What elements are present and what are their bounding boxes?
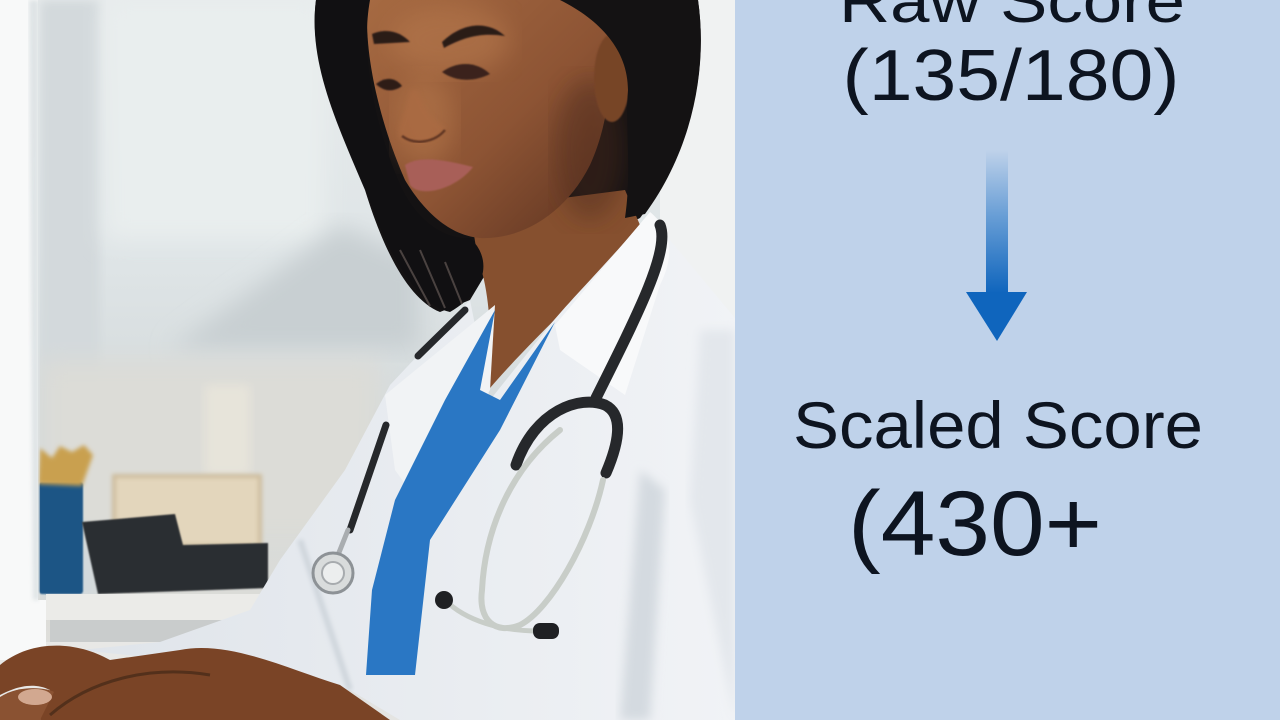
- hair back: [315, 0, 701, 312]
- coat folds: [620, 470, 665, 720]
- stethoscope chest piece: [313, 553, 353, 593]
- picture frame: [114, 476, 260, 546]
- nose: [399, 90, 445, 143]
- ear: [594, 34, 630, 122]
- pencil cup: [39, 482, 83, 594]
- lips: [405, 159, 473, 191]
- monitor edge: [0, 0, 46, 660]
- face: [367, 0, 610, 238]
- desk objects: [0, 445, 268, 720]
- photo: doctor at computer: [0, 0, 735, 720]
- scaled score value: (430+: [848, 473, 1102, 575]
- hair front: [315, 0, 483, 312]
- stethoscope: [336, 225, 662, 631]
- scaled score label: Scaled Score: [793, 388, 1203, 462]
- stethoscope ear tips: [435, 591, 559, 639]
- arrow: raw to scaled: [966, 150, 1027, 341]
- office background: [0, 0, 735, 720]
- white coat: [80, 212, 735, 720]
- panel: score conversion: [735, 0, 1280, 720]
- neck: [470, 190, 640, 388]
- eyebrows and eyes: [372, 31, 410, 44]
- shelf: [46, 594, 266, 620]
- scrubs: [366, 310, 555, 675]
- desk organizer: [82, 514, 268, 594]
- raw score value: (135/180): [842, 36, 1180, 116]
- hands on keyboard: [0, 646, 390, 720]
